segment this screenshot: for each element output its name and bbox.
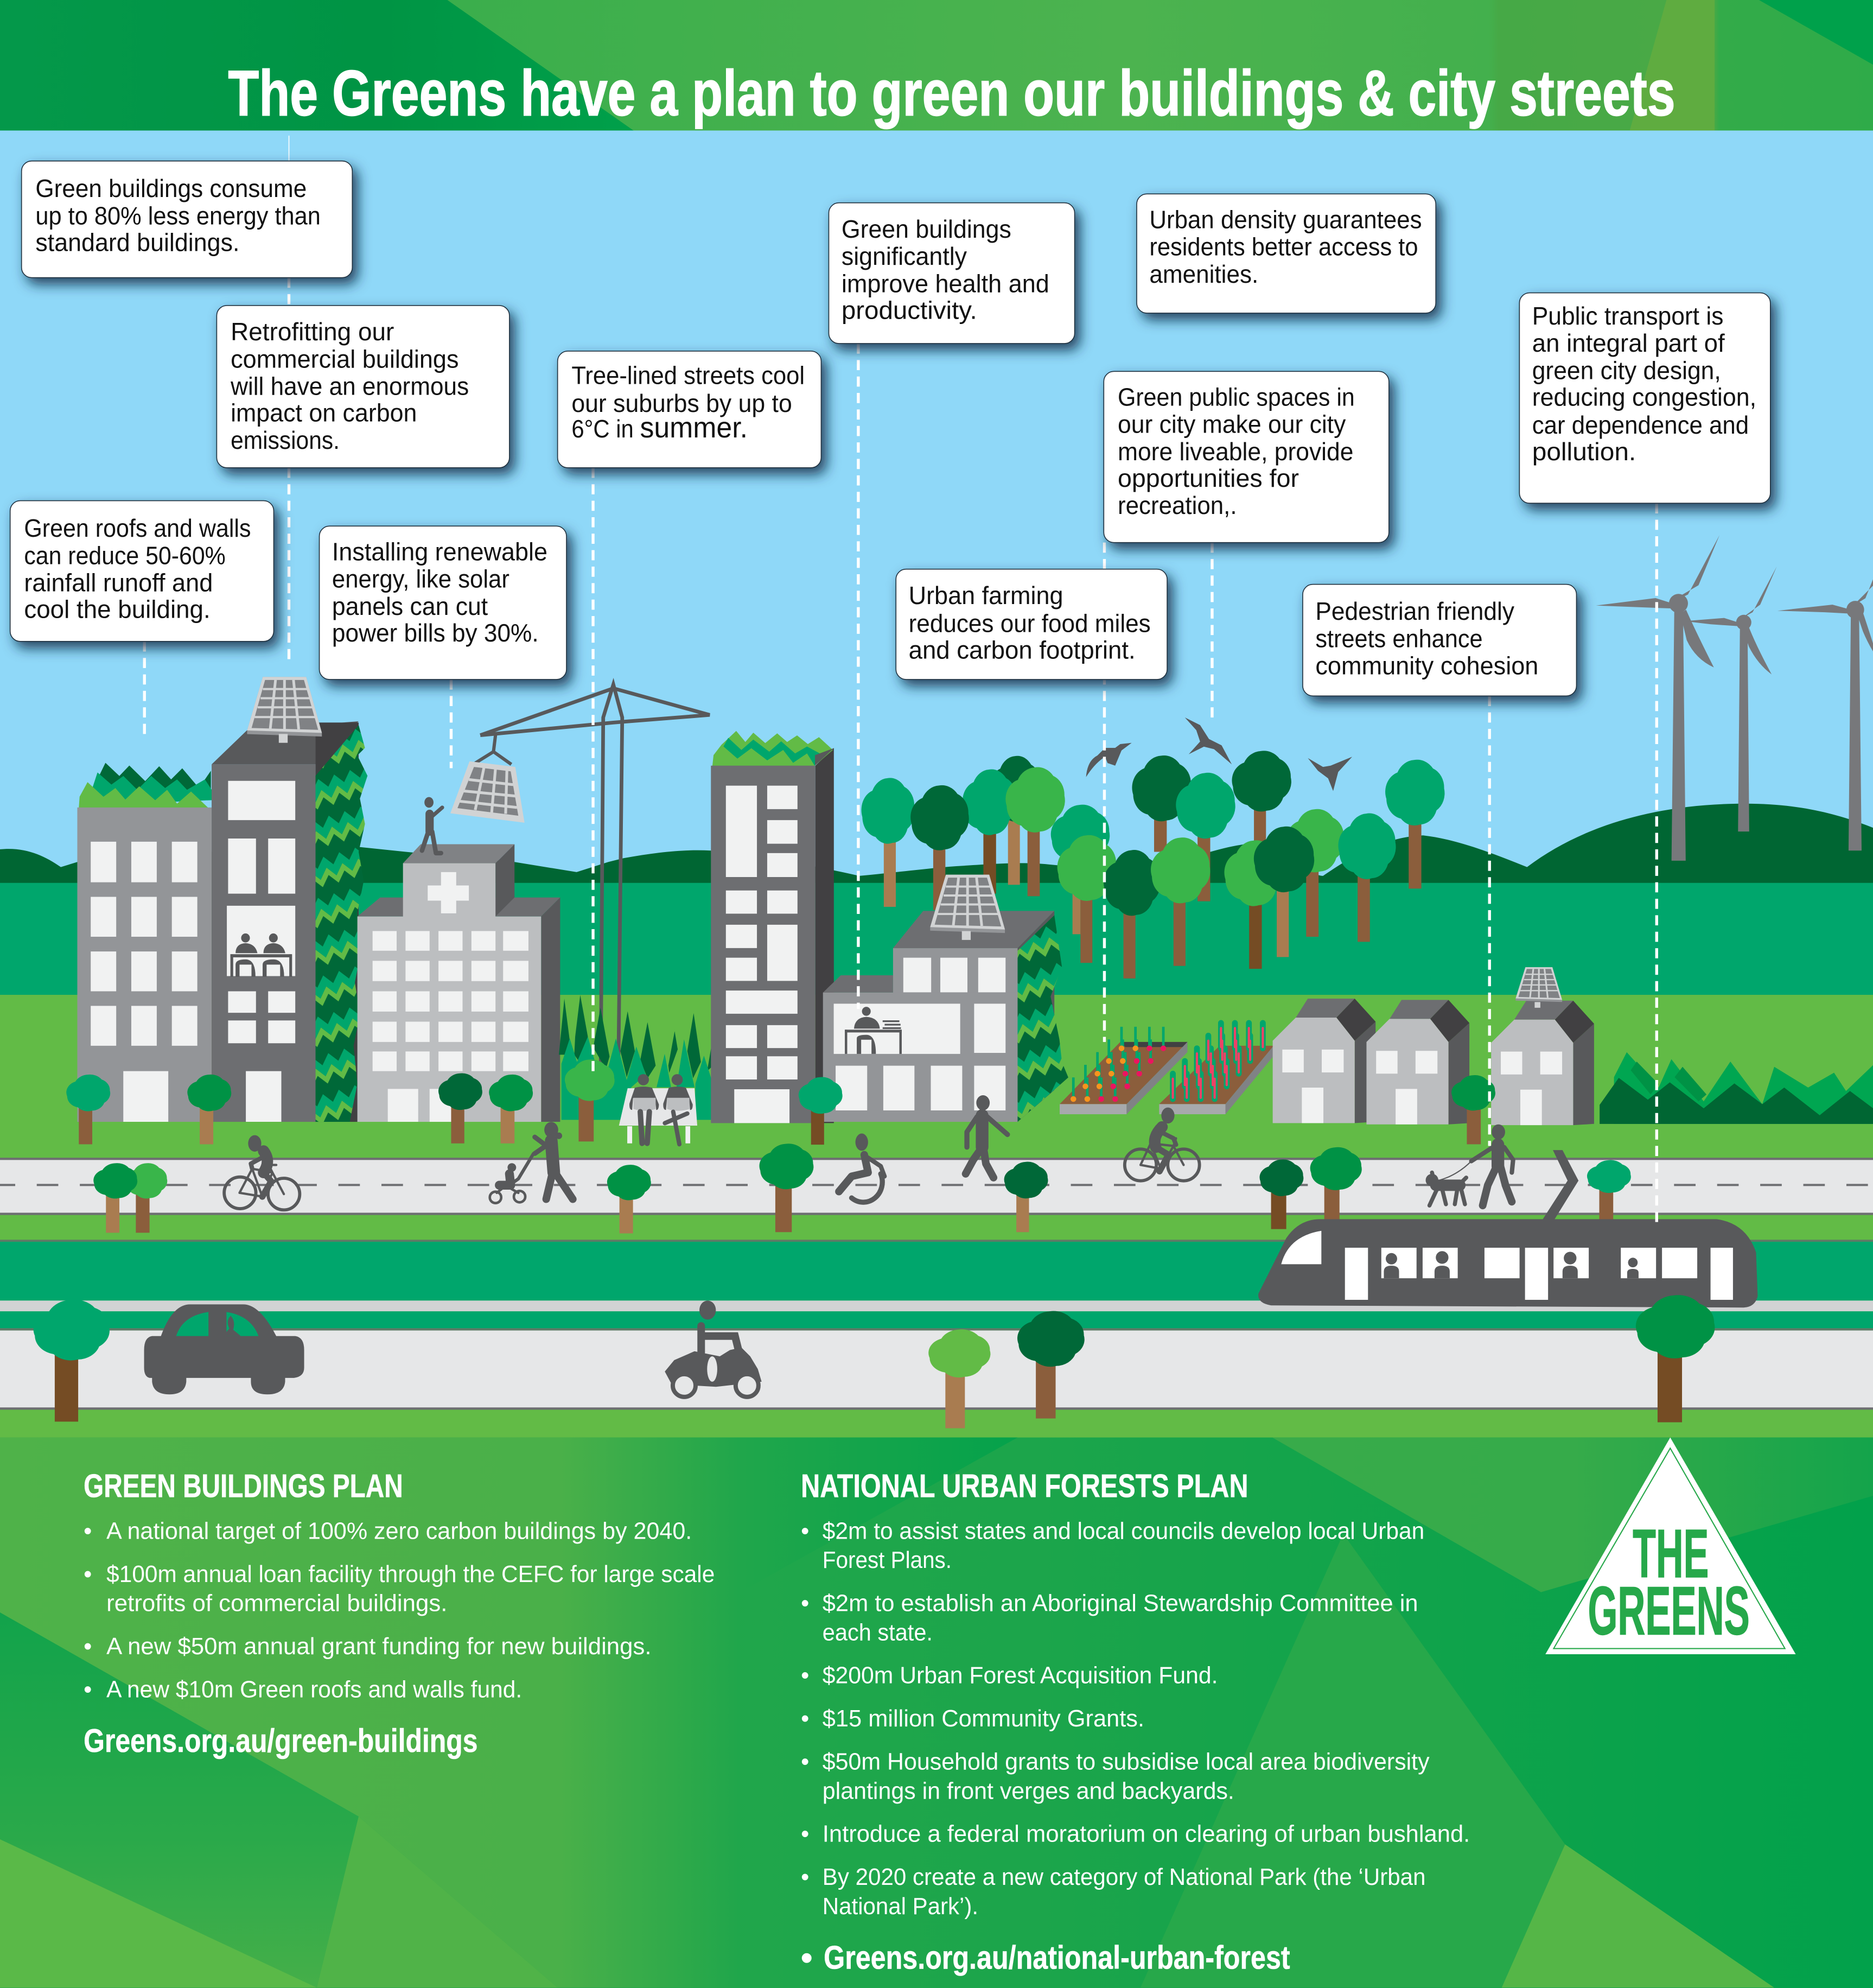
callout: public transport (1519, 293, 1770, 503)
callout: green roofs: cool the building. (24, 595, 211, 624)
scooter rider (665, 1300, 762, 1397)
callout: tree-lined streets: summer. (640, 411, 748, 444)
bullet list: • (84, 1518, 92, 1544)
bullet list: • (801, 1591, 809, 1617)
callout: green roofs: rainfall runoff and (24, 569, 213, 597)
callout: urban density (1137, 194, 1436, 313)
callout: pedestrian friendly: community cohesion (1315, 652, 1538, 680)
hanging solar panel (450, 761, 525, 823)
callout: renewable energy: power bills by 30%. (332, 619, 539, 647)
bullet list: • (801, 1518, 809, 1544)
raised vegetable beds (1060, 1023, 1273, 1114)
callout: green public spaces: Green public spaces in (1118, 383, 1355, 411)
bullet list: $15 million Community Grants. (823, 1706, 1144, 1732)
hedge (1600, 1052, 1873, 1124)
hospital (358, 797, 560, 1122)
callout: tree-lined streets (558, 351, 821, 468)
person walking a dog (1426, 1125, 1513, 1205)
bullet list: • (801, 1821, 809, 1847)
link: Greens.org.au/green-buildings (84, 1722, 478, 1759)
bed 1 (1060, 1027, 1187, 1114)
row of houses (1273, 967, 1594, 1125)
turbine 3 (1778, 567, 1873, 850)
callout: urban density: residents better access to (1149, 233, 1418, 261)
callout: public transport: green city design, (1532, 356, 1721, 384)
bed 2 (1159, 1023, 1273, 1114)
callout: urban density: amenities. (1149, 260, 1258, 288)
callout: renewable energy (320, 526, 566, 679)
cyclist 2 (1125, 1108, 1200, 1181)
tram windows and doors (1345, 1248, 1733, 1300)
near grass (0, 995, 1873, 1438)
callout: renewable energy: Installing renewable (332, 537, 547, 566)
building 1 with green roof (77, 763, 212, 1122)
building 2 with green wall and solar panel (212, 677, 367, 1122)
callout: green roofs: Green roofs and walls (24, 514, 251, 542)
building 3 with green roof (711, 731, 834, 1123)
callout: retrofitting: Retrofitting our (231, 317, 394, 346)
street trees on upper road (93, 1144, 1631, 1234)
bullet list: Forest Plans. (823, 1547, 952, 1573)
callout: urban farming: reduces our food miles (909, 609, 1151, 637)
callout: public transport: car dependence and (1532, 411, 1749, 439)
bullet list (801, 1518, 1470, 1920)
callout: public transport: reducing congestion, (1532, 383, 1756, 411)
cyclist 1 (224, 1135, 300, 1210)
link: • (801, 1939, 812, 1976)
green roof (712, 731, 834, 766)
wind turbines (1596, 535, 1873, 861)
bullet list: • (801, 1749, 809, 1775)
heading: GREEN BUILDINGS PLAN (84, 1467, 403, 1504)
callout: health and productivity: productivity. (842, 296, 977, 324)
green roof (79, 763, 212, 809)
upper street (0, 1158, 1873, 1215)
dashed pointer lines (144, 136, 1657, 1228)
The Greens logo (1545, 1438, 1796, 1654)
callout: green roofs (10, 501, 273, 642)
birds (1086, 717, 1352, 791)
solar panel (930, 875, 1005, 933)
woman pushing stroller (490, 1122, 573, 1203)
callout: green public spaces: recreation,. (1118, 491, 1237, 519)
callout: green public spaces: more liveable, provide (1118, 437, 1353, 466)
heading: NATIONAL URBAN FORESTS PLAN (801, 1467, 1248, 1504)
callout: retrofitting (216, 306, 509, 468)
callout: public transport: Public transport is (1532, 302, 1723, 330)
bullet list: • (801, 1864, 809, 1890)
callout: urban density: Urban density guarantees (1149, 205, 1422, 233)
house 2 (1366, 1000, 1469, 1125)
callout: health and productivity: Green buildings (842, 215, 1011, 243)
pantograph (1541, 1150, 1578, 1222)
hospital cross (428, 872, 469, 913)
tram (1258, 1150, 1757, 1307)
callout: public transport: pollution. (1532, 437, 1636, 466)
bullet list: By 2020 create a new category of National Park (the ‘Urban (823, 1864, 1426, 1890)
tram corridor (0, 1240, 1873, 1329)
turbine 2 (1684, 567, 1776, 831)
The Greens logo: GREENS (1588, 1573, 1750, 1649)
callout: urban farming: Urban farming (909, 581, 1063, 609)
callout: green public spaces: our city make our city (1118, 410, 1346, 439)
callout: health and productivity: improve health and (842, 269, 1049, 297)
lower road (0, 1328, 1873, 1409)
trees along the building frontage (66, 1059, 1495, 1145)
callout: green buildings energy: Green buildings consume (35, 174, 307, 202)
national urban forests plan: Greens.org.au/national-urban-forest (824, 1939, 1290, 1976)
back row of trees (862, 751, 1445, 979)
callout: retrofitting: will have an enormous (230, 372, 469, 401)
callout: green buildings energy (22, 161, 352, 278)
green wall (316, 725, 367, 1122)
national urban forests plan (801, 1467, 1470, 1976)
distant field (0, 883, 1873, 997)
crane with hanging solar panel (450, 684, 710, 1077)
bullet list: • (801, 1663, 809, 1689)
callout: public transport: an integral part of (1532, 329, 1725, 357)
dog (1426, 1172, 1466, 1205)
green buildings plan (84, 1467, 715, 1759)
bullet list: plantings in front verges and backyards. (823, 1778, 1234, 1804)
bullet list: A national target of 100% zero carbon buildings by 2040. (106, 1518, 692, 1544)
windscreen (1281, 1231, 1321, 1264)
callout: tree-lined streets: Tree-lined streets cool (571, 361, 805, 390)
callout: renewable energy: panels can cut (332, 592, 488, 620)
callout: pedestrian friendly (1303, 585, 1576, 696)
callout: tree-lined streets: our suburbs by up to (571, 389, 792, 417)
sky (0, 131, 1873, 891)
bullet list: each state. (823, 1619, 933, 1646)
foreground trees (34, 1295, 1715, 1428)
bullet list: • (84, 1676, 92, 1703)
tram passengers (1384, 1251, 1639, 1278)
bullet list: • (84, 1634, 92, 1660)
bullet list (84, 1518, 715, 1703)
callout: retrofitting: emissions. (231, 426, 340, 454)
callout: retrofitting: impact on carbon (231, 399, 417, 427)
people at desk (231, 933, 292, 977)
bullet list: Introduce a federal moratorium on clearing of urban bushland. (823, 1821, 1470, 1847)
park bench with two people (619, 1074, 697, 1144)
bullet list: $50m Household grants to subsidise local area biodiversity (823, 1749, 1430, 1775)
callout: pedestrian friendly: Pedestrian friendly (1315, 597, 1515, 625)
green wall (1017, 915, 1068, 1122)
callout: green roofs: can reduce 50-60% (24, 541, 226, 569)
bullet list: • (801, 1706, 809, 1732)
bullet list: $2m to establish an Aboriginal Stewardship Committee in (823, 1591, 1418, 1617)
car (144, 1304, 304, 1394)
person at desk (845, 1007, 902, 1054)
callout: renewable energy: energy, like solar (332, 565, 509, 593)
turbine 1 (1596, 535, 1719, 861)
house 3 with solar panel (1491, 1001, 1594, 1125)
wheelchair user (839, 1134, 884, 1202)
bullet list: A new $10m Green roofs and walls fund. (106, 1676, 522, 1703)
bullet list: National Park’). (823, 1894, 978, 1920)
callout: green buildings energy: up to 80% less energy than (35, 201, 321, 230)
callout: tree-lined streets: 6°C in (571, 415, 634, 443)
callout: urban farming (896, 569, 1167, 679)
callout: green buildings energy: standard buildings. (35, 228, 239, 256)
bullet list: $2m to assist states and local councils develop local Urban (823, 1518, 1424, 1544)
solar panel (247, 677, 322, 736)
header band with title (0, 0, 1873, 131)
hills (0, 804, 1873, 887)
bottom panel background (0, 1438, 1873, 1988)
The Greens logo: THE (1633, 1515, 1709, 1592)
worker on roof (422, 797, 442, 853)
walking person (966, 1095, 1008, 1178)
bullet list: retrofits of commercial buildings. (106, 1591, 447, 1617)
bullet list: $100m annual loan facility through the CEFC for large scale (106, 1561, 715, 1587)
bullet list: $200m Urban Forest Acquisition Fund. (823, 1663, 1218, 1689)
callout: green public spaces: opportunities for (1118, 464, 1299, 492)
conifers behind bench (559, 995, 711, 1120)
callout: retrofitting: commercial buildings (231, 345, 458, 373)
bullet list: A new $50m annual grant funding for new buildings. (106, 1634, 651, 1660)
bullet list: • (84, 1561, 92, 1587)
car windows (176, 1312, 258, 1336)
callout: urban farming: and carbon footprint. (909, 636, 1136, 664)
callout: health and productivity (829, 203, 1075, 344)
callout: pedestrian friendly: streets enhance (1315, 624, 1483, 652)
building 4 with green wall and solar panel (823, 875, 1068, 1122)
house 1 (1273, 999, 1375, 1123)
callout: health and productivity: significantly (842, 242, 967, 270)
callout: green public spaces (1104, 371, 1389, 543)
